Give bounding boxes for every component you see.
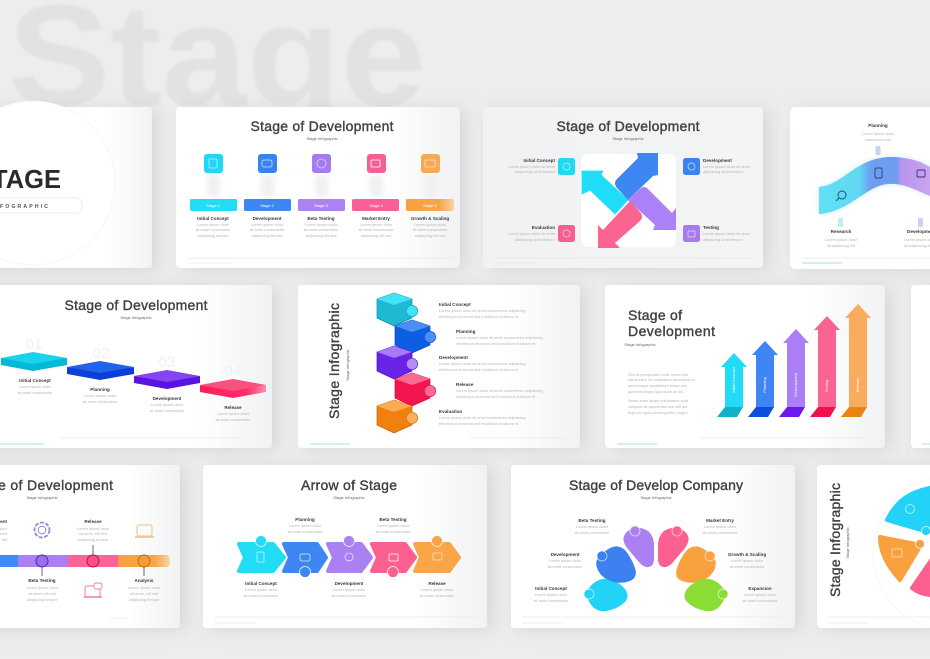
label: development: [332, 581, 367, 598]
label: release: Release: [428, 581, 446, 586]
body text: fugit sed quia consequuntur magni: [628, 410, 688, 415]
panel: stacked cubes: [298, 285, 580, 448]
label: initial concept: sit amet consectetur: [244, 593, 279, 598]
label: planning: consectetur elit: [865, 137, 892, 142]
chevron 3: [328, 536, 371, 571]
label: planning: Lorem ipsum dolor: [862, 131, 895, 136]
step 01: sit amet consectetur: [18, 390, 53, 395]
panel: stage of develop company: Stage Infographic: [640, 495, 672, 500]
label: planning: Planning: [868, 123, 888, 128]
panel: stage of development steps: [176, 107, 460, 268]
step 02: Planning: [90, 387, 110, 392]
label: analysis: [128, 578, 161, 602]
step 04: sit amet consectetur: [216, 417, 251, 422]
step 2: adipiscing elit sed: [252, 233, 282, 238]
step 5: Lorem ipsum dolor: [414, 222, 447, 227]
step 1: sit amet consectetur: [196, 227, 231, 232]
petal: growth and scaling: Growth & Scaling: [728, 552, 766, 557]
step 4: adipiscing elit sed: [361, 233, 391, 238]
label: beta testing: sit amet, elit sed: [28, 591, 56, 596]
label: beta testing: [26, 578, 59, 602]
petal: expansion: sit amet consectetur: [743, 598, 778, 603]
petal: growth and scaling: [676, 546, 766, 583]
item: development: Lorem ipsum dolor sit amet: [703, 164, 751, 169]
step 04: [200, 363, 266, 422]
cube 1: [377, 293, 412, 326]
step 5: [406, 154, 454, 238]
panel: rising arrows: Development: [628, 323, 715, 339]
label: beta testing: Beta Testing: [28, 578, 56, 583]
step 04: 04: [225, 363, 241, 380]
heading: Stage of Development: [250, 118, 394, 134]
chevron 4: [372, 544, 415, 578]
arrow 5: [841, 304, 871, 417]
text: release: Lorem ipsum dolor sit amet consectetur adipiscing: [456, 388, 542, 393]
step 5: Stage 5: [423, 203, 438, 208]
body text: Nemo enim ipsam voluptatem quia: [628, 398, 689, 403]
text: evaluation: [439, 409, 526, 426]
body text: Sed ut perspiciatis unde omnis iste: [628, 372, 688, 377]
icon: gear: [34, 522, 50, 538]
panel: arrow of stage: [203, 465, 487, 628]
item: initial concept: Initial Concept: [523, 158, 555, 163]
body text: doloremque laudantium totam rem: [628, 383, 687, 388]
text: initial concept: Initial Concept: [439, 302, 471, 307]
icon: chat laptop: [84, 583, 102, 597]
step 4: Lorem ipsum dolor: [360, 222, 393, 227]
step 1: [190, 154, 237, 238]
pie wedge: orange: [880, 537, 924, 580]
body text: aperiam eaque ipsa quae ab illo: [628, 389, 683, 394]
panel: rising arrows: Stage Infographic: [624, 342, 656, 347]
step 5: sit amet consectetur: [413, 227, 448, 232]
label: planning: Lorem ipsum dolor: [289, 523, 322, 528]
petal: growth and scaling: Lorem ipsum dolor: [731, 558, 764, 563]
label: development: [904, 170, 930, 248]
cube 3: [377, 346, 412, 379]
item: initial concept: adipiscing sedd tempor: [515, 169, 556, 174]
chevron 5: [415, 536, 459, 571]
step 02: sit amet consectetur: [83, 399, 118, 404]
label: beta testing: Beta Testing: [379, 517, 407, 522]
step 02: 02: [93, 345, 109, 362]
item: development: [683, 158, 751, 175]
item: testing: [683, 225, 751, 242]
step 01: Lorem ipsum dolor: [19, 384, 52, 389]
label: research: [825, 191, 858, 248]
icon: chart laptop: [135, 525, 154, 537]
step 5: Growth & Scaling: [411, 216, 449, 221]
panel: timeline: Stage Infographic: [26, 495, 58, 500]
petal: beta testing: Lorem ipsum dolor: [576, 524, 609, 529]
wave chart: [819, 157, 930, 214]
petal: expansion: [684, 579, 778, 611]
petal: initial concept: Lorem ipsum dolor: [535, 592, 568, 597]
text: planning: Lorem ipsum dolor sit amet consectetur adipiscing: [456, 335, 542, 340]
item: initial concept: Lorem ipsum dolor sit amet: [508, 164, 556, 169]
label: beta testing: adipiscing tempor: [27, 597, 58, 602]
arrow 5: Release: [855, 377, 860, 392]
chevron 2: [284, 544, 326, 578]
label: release: Release: [84, 519, 102, 524]
step 3: adipiscing elit sed: [306, 233, 336, 238]
step 03: 03: [159, 354, 175, 371]
text: initial concept: [439, 302, 526, 319]
label: development: Development: [335, 581, 364, 586]
label: development: sit amet consectetur: [332, 593, 367, 598]
label: development: Lorem ipsum dolor: [333, 587, 366, 592]
text: initial concept: elit tempor eiusmod sed incididunt ut labore et: [439, 314, 519, 319]
label: analysis: adipiscing tempor: [129, 597, 160, 602]
label: initial concept: Initial Concept: [245, 581, 277, 586]
label: partial left: [0, 519, 8, 542]
text: planning: [456, 329, 542, 346]
label: analysis: sit amet, elit sed: [130, 591, 158, 596]
pie wedge: pink: [912, 559, 930, 595]
arrow 1: [717, 353, 747, 417]
text: release: [456, 382, 542, 399]
item: evaluation: Evaluation: [532, 225, 555, 230]
step 04: Lorem ipsum dolor: [217, 411, 250, 416]
arrow 1: Initial Concept: [731, 366, 736, 393]
label: initial concept: Lorem ipsum dolor: [245, 587, 278, 592]
step 3: sit amet consectetur: [304, 227, 339, 232]
petal: initial concept: sit amet consectetur: [534, 598, 569, 603]
cube 2: [395, 320, 430, 353]
petal: development: Development: [551, 552, 580, 557]
step 03: [134, 354, 200, 413]
step 02: Lorem ipsum dolor: [84, 393, 117, 398]
label: beta testing: [376, 517, 411, 534]
step 3: Lorem ipsum dolor: [305, 222, 338, 227]
label: release: sit amet, elit sed: [79, 531, 107, 536]
step 4: Stage 4: [369, 203, 384, 208]
label: planning: Planning: [295, 517, 315, 522]
label: planning: sit amet consectetur: [288, 529, 323, 534]
panel: arrow of stage: Stage Infographic: [333, 495, 365, 500]
arrow 4: [810, 316, 840, 417]
panel: partial next slide: [911, 285, 930, 448]
heading: Stage of Development: [556, 118, 700, 134]
label: release: adipiscing tempor: [78, 537, 109, 542]
item: evaluation: [508, 225, 575, 242]
item: initial concept: [508, 158, 575, 175]
step 1: adipiscing elit sed: [198, 233, 228, 238]
text: release: Release: [456, 382, 474, 387]
panel: pie infographic: Stage Infographic: [845, 527, 850, 559]
heading: Stage of: [628, 307, 682, 323]
step 03: sit amet consectetur: [150, 408, 185, 413]
petal: beta testing: Beta Testing: [578, 518, 606, 523]
text: release: elit tempor eiusmod sed incididunt ut labore et: [456, 394, 536, 399]
label: release: sit amet consectetur: [420, 593, 455, 598]
body text: voluptas sit aspernatur aut odit aut: [628, 404, 688, 409]
step 2: Lorem ipsum dolor: [251, 222, 284, 227]
step 2: [244, 154, 291, 238]
petal: beta testing: [575, 518, 654, 567]
label: planning: [862, 123, 895, 178]
step 01: [1, 336, 67, 395]
step 1: Stage 1: [206, 203, 221, 208]
step 04: Release: [224, 405, 242, 410]
panel: timeline: [0, 465, 180, 628]
text: development: elit tempor eiusmod sed incididunt ut labore et: [439, 367, 519, 372]
label: release: Lorem ipsum dolor: [421, 587, 454, 592]
text: planning: Planning: [456, 329, 476, 334]
panel: four arrows: Stage Infographic: [612, 136, 644, 141]
item: development: Development: [703, 158, 732, 163]
item: testing: Testing: [703, 225, 719, 230]
panel: four arrows: [483, 107, 763, 268]
step 1: Lorem ipsum dolor: [197, 222, 230, 227]
panel: rising arrows: [605, 285, 885, 448]
text: evaluation: Evaluation: [439, 409, 462, 414]
item: testing: adipiscing sedd tempor: [703, 237, 744, 242]
item: development: adipiscing sedd tempor: [703, 169, 744, 174]
label: beta testing: Lorem ipsum dolor: [377, 523, 410, 528]
step 03: Lorem ipsum dolor: [151, 402, 184, 407]
number badges: [406, 305, 436, 424]
chevron 1: [239, 536, 284, 571]
panel: title slide: [0, 101, 152, 268]
heading: Stage of Develop Company: [569, 477, 743, 493]
label: analysis: Analysis: [135, 578, 154, 583]
cube 4: [395, 373, 430, 406]
step 2: Development: [253, 216, 282, 221]
vertical heading: Stage Infographic: [326, 303, 342, 419]
heading: Stage of Development: [64, 297, 208, 313]
step 4: Market Entry: [362, 216, 390, 221]
petal: market entry: sit amet consectetur: [703, 530, 738, 535]
vertical heading: Stage Infographic: [827, 483, 843, 597]
step 5: adipiscing elit sed: [415, 233, 445, 238]
timeline bar: [0, 545, 170, 576]
text: evaluation: elit tempor eiusmod sed incididunt ut labore et: [439, 421, 519, 426]
panel: isometric steps: Stage Infographic: [120, 315, 152, 320]
petal: market entry: Lorem ipsum dolor: [704, 524, 737, 529]
petal: growth and scaling: sit amet consectetur: [730, 564, 765, 569]
step 2: sit amet consectetur: [250, 227, 285, 232]
petal: development: sit amet consectetur: [548, 564, 583, 569]
panel: stacked cubes: Stage Infographic: [345, 349, 350, 381]
label: analysis: Lorem ipsum dolor: [128, 585, 161, 590]
text: evaluation: Lorem ipsum dolor sit amet consectetur adipiscing: [439, 415, 526, 420]
step 4: sit amet consectetur: [359, 227, 394, 232]
step 3: Beta Testing: [307, 216, 335, 221]
label: research: Lorem ipsum dolor: [825, 237, 858, 242]
panel: pie infographic: [817, 465, 930, 630]
step 3: Stage 3: [314, 203, 329, 208]
body text: natus error sit voluptatem accusantium: [628, 377, 695, 382]
label: planning: [288, 517, 323, 534]
arrow 3: [779, 329, 809, 417]
text: development: Development: [439, 355, 468, 360]
step 02: [67, 345, 134, 404]
arrow 3: Development: [793, 372, 798, 397]
step 01: 01: [26, 336, 42, 353]
label: initial concept: [244, 581, 279, 598]
step 3: [298, 154, 345, 238]
heading: Arrow of Stage: [301, 477, 397, 493]
label: partial left: elit: [2, 537, 8, 542]
petal: beta testing: sit amet consectetur: [575, 530, 610, 535]
panel: isometric steps: [0, 285, 272, 448]
step 03: Development: [153, 396, 182, 401]
petal: development: Lorem ipsum dolor: [549, 558, 582, 563]
arrow 4: Testing: [824, 380, 829, 392]
item: evaluation: adipiscing sedd tempor: [515, 237, 556, 242]
petal: development: [548, 546, 636, 583]
petal: expansion: Lorem ipsum dolor: [744, 592, 777, 597]
label: research: Research: [831, 229, 852, 234]
heading: e of Development: [0, 477, 113, 493]
arrow 2: Planning: [762, 377, 767, 393]
label: beta testing: Lorem ipsum dolor: [26, 585, 59, 590]
item: evaluation: Lorem ipsum dolor sit amet: [508, 231, 556, 236]
panel: stage of development steps: Stage Infographic: [306, 136, 338, 141]
text: initial concept: Lorem ipsum dolor sit amet consectetur adipiscing: [439, 308, 526, 313]
petal: market entry: Market Entry: [706, 518, 734, 523]
petal: expansion: Expansion: [748, 586, 772, 591]
text: development: Lorem ipsum dolor sit amet consectetur adipiscing: [439, 361, 526, 366]
text: development: [439, 355, 526, 372]
label: release: [77, 519, 110, 542]
label: release: Lorem ipsum dolor: [77, 526, 110, 531]
pie wedge: cyan: [887, 487, 930, 536]
body text: [628, 372, 695, 415]
cross arrows chart: [582, 153, 676, 248]
label: beta testing: sit amet consectetur: [376, 529, 411, 534]
step 01: Initial Concept: [19, 378, 51, 383]
item: testing: Lorem ipsum dolor sit amet: [703, 231, 751, 236]
label: release: [420, 581, 455, 598]
petal: initial concept: [534, 579, 628, 611]
panel: wave roadmap: [790, 107, 930, 269]
step 1: Initial Concept: [197, 216, 229, 221]
step 2: Stage 2: [260, 203, 275, 208]
label: research: sit adipiscing elit: [827, 243, 856, 248]
petal: initial concept: Initial Concept: [535, 586, 567, 591]
panel: stage of develop company: [511, 465, 795, 628]
arrow 2: [748, 341, 778, 417]
step 4: [352, 154, 399, 238]
text: planning: elit tempor eiusmod sed incididunt ut labore et: [456, 341, 536, 346]
petal: market entry: [658, 518, 738, 567]
cube 5: [377, 400, 412, 433]
